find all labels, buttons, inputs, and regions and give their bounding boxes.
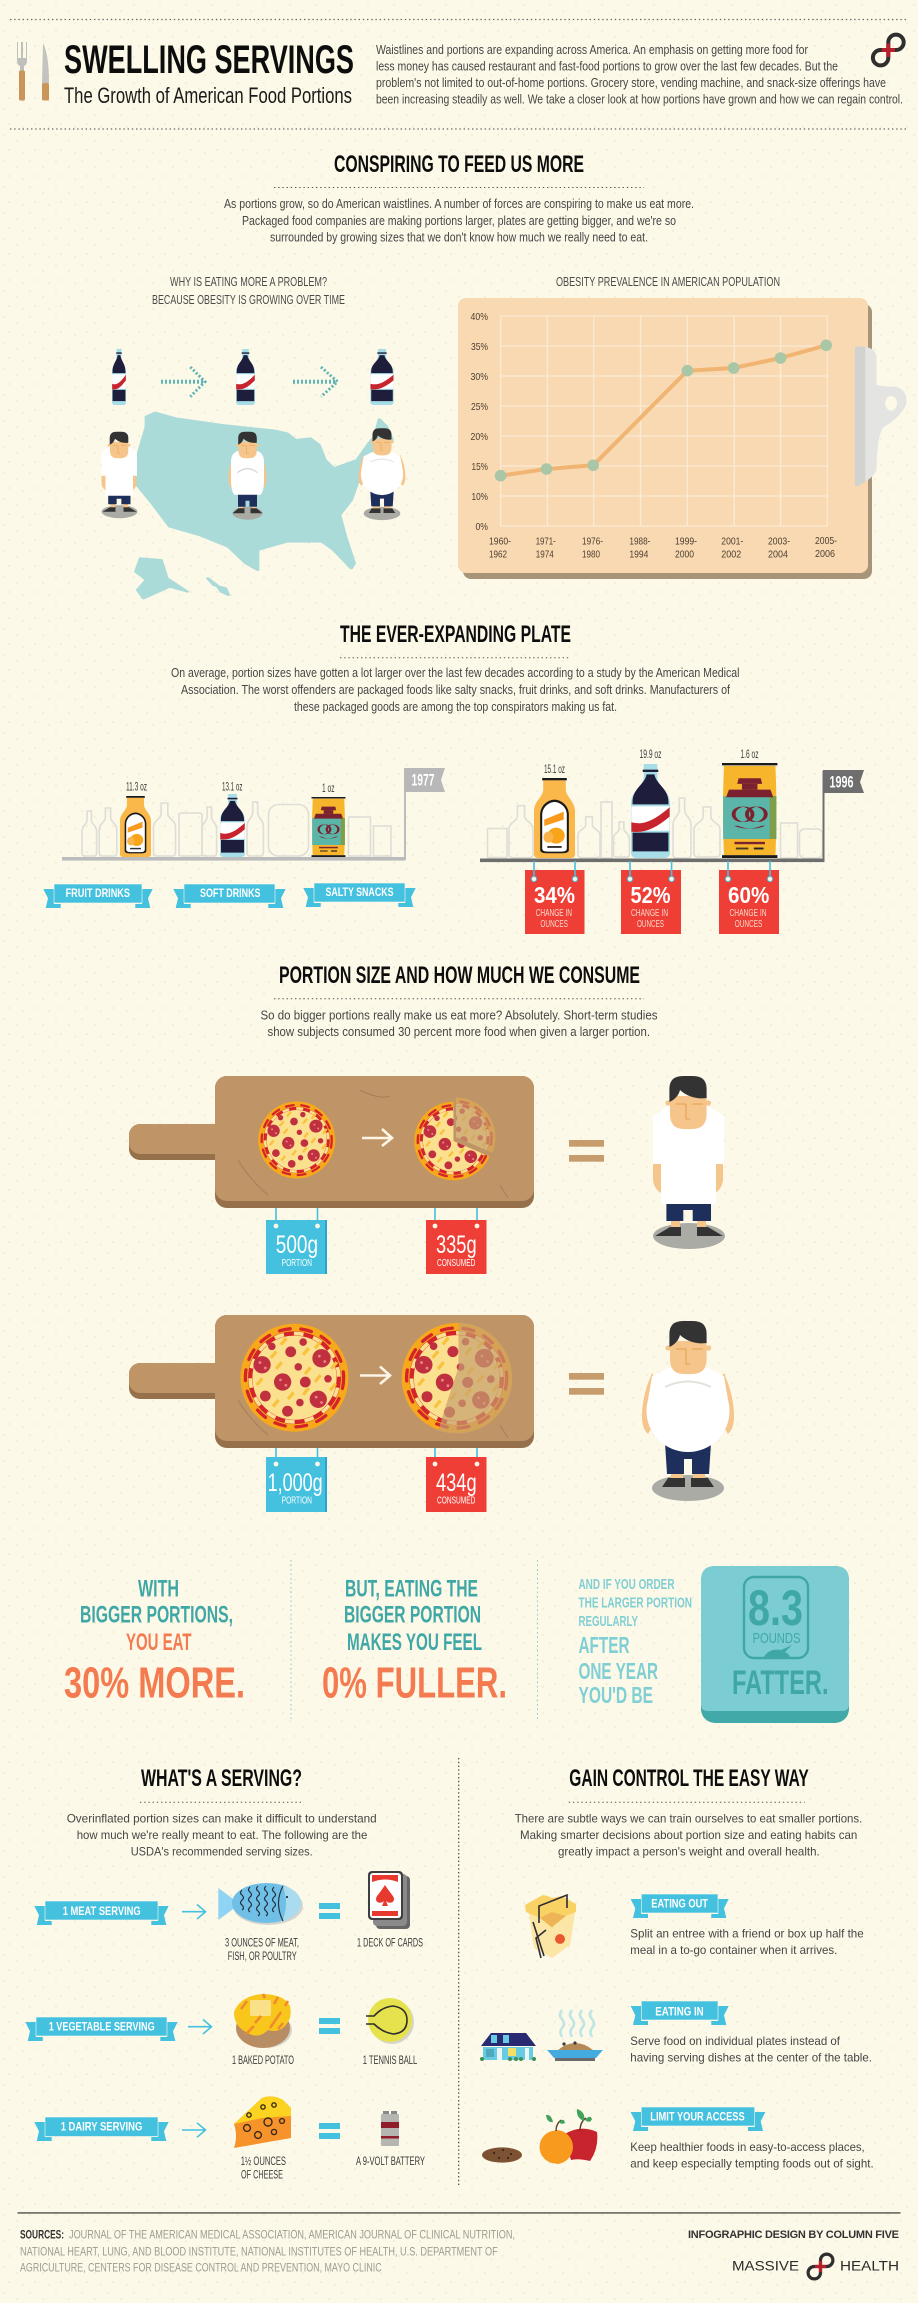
- ribbon: 1 meat serving: [34, 1901, 169, 1925]
- subheading: obesity chart: OBESITY PREVALENCE IN AMERICAN POPULATION: [556, 274, 780, 289]
- text: limit your access: and keep especially tempting foods out of sight.: [630, 2156, 874, 2170]
- heading: portion size: PORTION SIZE AND HOW MUCH WE CONSUME: [279, 962, 640, 989]
- title: SWELLING SERVINGS: [64, 38, 354, 82]
- ribbon: 1 vegetable serving: 1 VEGETABLE SERVING: [49, 2022, 155, 2034]
- chart: obesity prevalence clipboard: 1971-: [536, 536, 556, 548]
- icon: deck of cards: [368, 1871, 410, 1929]
- icon: house: [480, 2033, 536, 2061]
- stat: 30 percent more: WITH: [138, 1576, 179, 1603]
- intro text: [376, 43, 903, 106]
- icon: small soda bottle: [112, 349, 126, 405]
- bathroom scale: 8.3 pounds fatter: POUNDS: [752, 1630, 800, 1647]
- bathroom scale: 8.3 pounds fatter: [701, 1566, 849, 1723]
- label: 13.1 oz: 13.1 oz: [222, 780, 242, 794]
- stat: 0 percent fuller: BUT, EATING THE: [345, 1576, 478, 1603]
- tag: 34 percent: [525, 861, 584, 934]
- text: control intro: There are subtle ways we can train ourselves to eat smaller portions.: [515, 1812, 862, 1826]
- label: 1 oz: 1 oz: [322, 781, 334, 795]
- equals: dairy: [319, 2123, 340, 2139]
- intro text: less money has caused restaurant and fast-food portions to grow over the last few decades. But the: [376, 60, 838, 74]
- icon: baked potato: [234, 1994, 292, 2048]
- equals sign: thin: [569, 1140, 604, 1162]
- icon: clipboard clip: [855, 346, 906, 487]
- stat: one year text: [578, 1576, 692, 1708]
- label: 3 ounces: FISH, OR POULTRY: [228, 1949, 297, 1963]
- tag: 60 percent: [719, 861, 779, 934]
- text: limit your access: [630, 2140, 874, 2170]
- heading: what's a serving: WHAT'S A SERVING?: [141, 1765, 302, 1792]
- figure: heavy person large: [642, 1321, 734, 1501]
- tag: 52 percent: OUNCES: [637, 919, 664, 930]
- tag: 1000g portion: PORTION: [282, 1496, 312, 1506]
- icon: plate of food: [547, 2010, 603, 2061]
- chart: obesity prevalence clipboard: 1999-: [675, 536, 697, 548]
- label: 19.9 oz: 19.9 oz: [640, 747, 662, 761]
- chart: obesity prevalence clipboard: 2005-: [815, 535, 837, 547]
- label: 1.6 oz: 1.6 oz: [740, 747, 758, 761]
- label: 11.3 oz: 11.3 oz: [126, 780, 147, 794]
- text: conspiring intro: Packaged food companies are making portions larger, plates are getting bigger, and we're so: [242, 214, 676, 228]
- arrow: large pizza: [360, 1366, 390, 1384]
- footer: sources: [20, 2230, 515, 2275]
- label: cheese: OF CHEESE: [241, 2168, 283, 2182]
- icon: takeout box: [525, 1895, 576, 1958]
- text: control intro: [515, 1812, 862, 1858]
- subheading: why eating more: WHY IS EATING MORE A PROBLEM?: [170, 274, 327, 289]
- intro text: Waistlines and portions are expanding across America. An emphasis on getting more food for: [376, 43, 808, 57]
- tag: 60 percent: CHANGE IN: [730, 908, 766, 919]
- text: serving intro: Overinflated portion sizes can make it difficult to understand: [67, 1812, 377, 1826]
- icon: cheese: [234, 2096, 291, 2148]
- flag: 1977: [404, 768, 445, 792]
- label: cheese: 1½ OUNCES: [241, 2154, 286, 2168]
- footer: Massive Health logo: [732, 2254, 899, 2279]
- text: plate intro: On average, portion sizes have gotten a lot larger over the last few decades according to a study by the American Medical: [171, 666, 740, 680]
- stat: one year text: REGULARLY: [578, 1613, 638, 1630]
- tag: 60 percent: OUNCES: [735, 919, 763, 930]
- chart: obesity prevalence clipboard: 1980: [582, 548, 600, 560]
- equals: meat: [319, 1903, 340, 1919]
- label: tennis: 1 TENNIS BALL: [363, 2053, 417, 2067]
- ribbon: limit your access: LIMIT YOUR ACCESS: [650, 2112, 745, 2124]
- arrow: dotted 2: [293, 367, 338, 397]
- chart: obesity prevalence clipboard: 1962: [489, 548, 507, 560]
- text: portion intro: So do bigger portions really make us eat more? Absolutely. Short-term studies: [260, 1008, 658, 1022]
- chart: obesity prevalence clipboard: 1974: [536, 548, 554, 560]
- label: battery: A 9-VOLT BATTERY: [356, 2154, 425, 2168]
- tag: 335g consumed: CONSUMED: [437, 1258, 475, 1269]
- icon: large soda bottle: [370, 349, 394, 405]
- footer: sources: JOURNAL OF THE AMERICAN MEDICAL ASSOCIATION, AMERICAN JOURNAL OF CLINICAL NUTRITION,: [69, 2230, 515, 2242]
- chart: obesity prevalence clipboard: 1994: [629, 548, 649, 560]
- stat: 0 percent fuller: 0% FULLER.: [322, 1659, 507, 1708]
- figure: heavy person: [359, 428, 405, 520]
- footer: credit: INFOGRAPHIC DESIGN BY COLUMN FIVE: [688, 2229, 899, 2241]
- icon: apple and orange: [540, 2109, 597, 2164]
- icon: whole large pizza: [240, 1324, 348, 1432]
- chart: obesity prevalence clipboard: 0%: [476, 521, 488, 533]
- chart: obesity prevalence clipboard: 2006: [815, 548, 835, 560]
- ribbon: soft drinks: [173, 884, 286, 908]
- tag: 52 percent: CHANGE IN: [631, 908, 668, 919]
- chart: obesity prevalence clipboard: [458, 298, 906, 579]
- shelf: 1996: [480, 747, 864, 862]
- stat: 30 percent more: [64, 1576, 245, 1708]
- text: control intro: Making smarter decisions about portion size and eating habits can: [520, 1828, 857, 1842]
- ribbon: eating in: EATING IN: [655, 2006, 704, 2018]
- stat: one year text: ONE YEAR: [578, 1658, 658, 1684]
- tag: 52 percent: [621, 861, 681, 934]
- icon: fish: [218, 1883, 303, 1925]
- tag: 60 percent: 60%: [728, 882, 769, 908]
- ribbon: salty snacks: SALTY SNACKS: [326, 887, 394, 899]
- icon: fruit drink 1996: [534, 778, 575, 858]
- cutting board: 1000g pizza: [129, 1315, 534, 1448]
- stat: 30 percent more: BIGGER PORTIONS,: [80, 1602, 233, 1629]
- text: eating out: meal in a to-go container when it arrives.: [630, 1943, 837, 1957]
- tag: 1000g portion: [266, 1448, 327, 1512]
- label: 3 ounces: 3 OUNCES OF MEAT,: [225, 1936, 299, 1950]
- flag: 1996: [823, 770, 864, 793]
- tag: 52 percent: 52%: [630, 882, 670, 908]
- arrow: dairy: [182, 2123, 206, 2137]
- cutting board: 500g pizza: [129, 1076, 534, 1208]
- footer: Massive Health logo: MASSIVE: [732, 2258, 799, 2274]
- tag: 500g portion: PORTION: [282, 1258, 312, 1269]
- tag: 34 percent: 34%: [534, 882, 575, 908]
- chart: obesity prevalence clipboard: 1988-: [629, 536, 651, 548]
- map: United States: [136, 413, 392, 598]
- label: 3 ounces: [225, 1936, 299, 1963]
- arrow: dotted 1: [161, 367, 205, 397]
- icon: fruit drink 1977: [120, 796, 151, 857]
- subtitle: The Growth of American Food Portions: [64, 83, 352, 108]
- tag: 1000g portion: 1,000g: [268, 1469, 323, 1497]
- ribbon: fruit drinks: FRUIT DRINKS: [66, 888, 130, 900]
- text: eating out: Split an entree with a friend or box up half the: [630, 1926, 864, 1940]
- ribbon: eating out: [631, 1894, 729, 1918]
- figure: thin person: [102, 432, 138, 518]
- flag: 1996: 1996: [830, 772, 854, 792]
- tag: 335g consumed: [426, 1208, 486, 1274]
- ribbon: 1 meat serving: 1 MEAT SERVING: [63, 1906, 141, 1918]
- footer: sources: SOURCES:: [20, 2230, 64, 2242]
- ribbon: soft drinks: SOFT DRINKS: [200, 888, 261, 900]
- ribbon: eating in: [631, 2001, 729, 2025]
- tag: 500g portion: 500g: [276, 1231, 318, 1259]
- label: potato: 1 BAKED POTATO: [232, 2053, 294, 2067]
- ribbon: 1 dairy serving: [34, 2117, 169, 2141]
- chart: obesity prevalence clipboard: 2001-: [721, 536, 744, 548]
- equals: vegetable: [319, 2018, 340, 2034]
- footer: sources: NATIONAL HEART, LUNG, AND BLOOD INSTITUTE, NATIONAL INSTITUTES OF HEALTH, U.S. DEPARTMENT OF: [20, 2246, 498, 2258]
- chart: obesity prevalence clipboard: 20%: [470, 431, 488, 443]
- stat: 30 percent more: YOU EAT: [126, 1629, 192, 1656]
- tag: 34 percent: OUNCES: [540, 919, 568, 930]
- icon: soft drink 1996: [631, 764, 670, 858]
- chart: obesity prevalence clipboard: 1960-: [489, 536, 511, 548]
- heading: ever-expanding plate: THE EVER-EXPANDING PLATE: [340, 621, 571, 648]
- chart: obesity prevalence clipboard: 30%: [470, 371, 488, 383]
- text: eating in: Serve food on individual plates instead of: [630, 2034, 841, 2048]
- ribbon: 1 vegetable serving: [25, 2017, 178, 2041]
- text: portion intro: show subjects consumed 30 percent more food when given a larger portion.: [268, 1025, 650, 1039]
- text: conspiring intro: surrounded by growing sizes that we don't know how much we really need to eat.: [270, 230, 648, 244]
- tag: 434g consumed: [426, 1448, 486, 1512]
- flag: 1977: 1977: [412, 770, 434, 790]
- arrow: small pizza: [362, 1129, 392, 1146]
- icon: cookie: [482, 2147, 522, 2163]
- ribbon: fruit drinks: [43, 884, 153, 908]
- chart: obesity prevalence clipboard: 15%: [472, 461, 488, 473]
- tag: 34 percent: CHANGE IN: [536, 908, 572, 919]
- icon: whole small pizza: [258, 1102, 335, 1178]
- icon: Massive Health logo: [873, 35, 904, 65]
- stat: one year text: THE LARGER PORTION: [578, 1594, 692, 1611]
- text: conspiring intro: As portions grow, so do American waistlines. A number of forces are conspiring to make us eat more.: [224, 197, 694, 211]
- icon: half eaten large pizza: [401, 1322, 512, 1434]
- stat: 30 percent more: 30% MORE.: [64, 1659, 245, 1708]
- arrow: meat: [182, 1904, 206, 1919]
- chart: obesity prevalence clipboard: 35%: [471, 341, 488, 353]
- chart: obesity prevalence clipboard: 2003-: [768, 536, 790, 548]
- tag: 434g consumed: CONSUMED: [437, 1496, 475, 1506]
- footer: Massive Health logo: HEALTH: [840, 2258, 899, 2274]
- icon: salty snack 1977: [312, 797, 346, 857]
- equals sign: heavy: [569, 1373, 604, 1395]
- subheading: why eating more: BECAUSE OBESITY IS GROWING OVER TIME: [152, 292, 345, 307]
- icon: medium soda bottle: [236, 349, 255, 405]
- chart: obesity prevalence clipboard: 1976-: [582, 536, 603, 548]
- ribbon: salty snacks: [303, 883, 416, 907]
- chart: obesity prevalence clipboard: 10%: [472, 491, 488, 503]
- text: plate intro: [171, 666, 740, 714]
- stat: one year text: AFTER: [578, 1632, 630, 1658]
- chart: obesity prevalence clipboard: 2000: [675, 548, 694, 560]
- text: serving intro: how much we're really meant to eat. The following are the: [77, 1828, 368, 1842]
- stat: one year text: AND IF YOU ORDER: [578, 1576, 675, 1593]
- label: cheese: [241, 2154, 286, 2182]
- figure: thin person large: [653, 1076, 725, 1249]
- label: 15.1 oz: 15.1 oz: [544, 762, 565, 776]
- arrow: vegetable: [188, 2020, 212, 2034]
- stat: 0 percent fuller: MAKES YOU FEEL: [347, 1629, 482, 1656]
- chart: obesity prevalence clipboard: 2004: [768, 548, 788, 560]
- tag: 500g portion: [266, 1208, 327, 1274]
- subheading: why eating more: [152, 274, 345, 307]
- text: control intro: greatly impact a person's weight and overall health.: [558, 1844, 820, 1858]
- chart: obesity prevalence clipboard: 40%: [470, 311, 488, 323]
- text: portion intro: [260, 1008, 658, 1039]
- text: plate intro: these packaged goods are among the top conspirators making us fat.: [294, 700, 617, 714]
- ribbon: limit your access: [631, 2107, 765, 2131]
- text: eating in: [630, 2034, 872, 2064]
- footer: sources: AGRICULTURE, CENTERS FOR DISEASE CONTROL AND PREVENTION, MAYO CLINIC: [20, 2263, 382, 2275]
- figure: medium person: [228, 432, 266, 520]
- text: eating in: having serving dishes at the center of the table.: [630, 2050, 872, 2064]
- tag: 434g consumed: 434g: [436, 1469, 477, 1497]
- shelf: 1977: [62, 768, 445, 861]
- bathroom scale: 8.3 pounds fatter: FATTER.: [732, 1664, 828, 1702]
- icon: partly eaten small pizza: [414, 1097, 496, 1180]
- icon: salty snack 1996: [722, 763, 777, 858]
- bathroom scale: 8.3 pounds fatter: 8.3: [748, 1580, 803, 1636]
- text: serving intro: USDA's recommended serving sizes.: [131, 1844, 313, 1858]
- ribbon: eating out: EATING OUT: [651, 1899, 708, 1911]
- tag: 335g consumed: 335g: [436, 1231, 477, 1259]
- text: eating out: [630, 1926, 864, 1957]
- label: deck: 1 DECK OF CARDS: [357, 1936, 423, 1950]
- stat: one year text: YOU'D BE: [578, 1682, 653, 1708]
- icon: battery: [381, 2111, 399, 2146]
- stat: 0 percent fuller: [322, 1576, 507, 1708]
- chart: obesity prevalence clipboard: 25%: [471, 401, 488, 413]
- text: limit your access: Keep healthier foods in easy-to-access places,: [630, 2140, 865, 2154]
- icon: fork and knife: [17, 42, 49, 100]
- text: plate intro: Association. The worst offenders are packaged foods like salty snacks, fruit drinks, and soft drinks. Manufacturers of: [181, 683, 730, 697]
- icon: tennis ball: [366, 1998, 414, 2044]
- text: serving intro: [67, 1812, 377, 1858]
- heading: conspiring: CONSPIRING TO FEED US MORE: [334, 151, 584, 178]
- stat: 0 percent fuller: BIGGER PORTION: [344, 1602, 481, 1629]
- icon: soft drink 1977: [220, 794, 245, 857]
- chart: obesity prevalence clipboard: 2002: [721, 548, 741, 560]
- text: conspiring intro: [224, 197, 694, 244]
- ribbon: 1 dairy serving: 1 DAIRY SERVING: [61, 2122, 142, 2134]
- icon: steam: [560, 2010, 594, 2037]
